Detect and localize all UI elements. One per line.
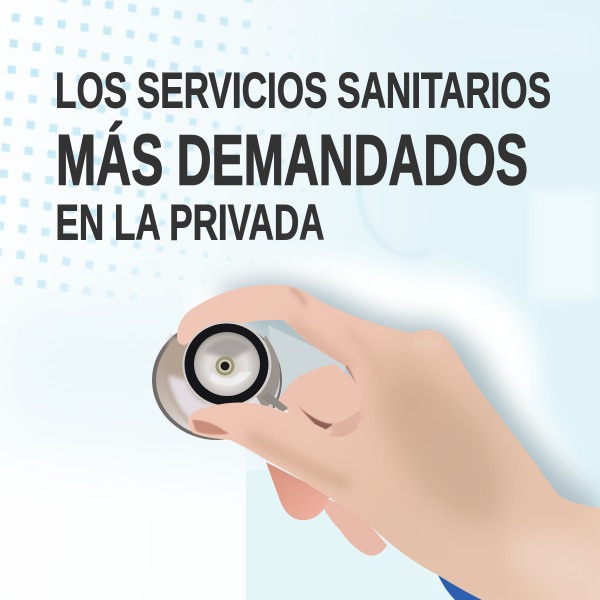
hand shadow and glow	[190, 259, 600, 570]
hand and index finger	[177, 285, 600, 600]
title line 3: EN LA PRIVADA	[56, 194, 324, 250]
title	[55, 62, 551, 250]
halftone dot pattern	[0, 0, 312, 300]
icon: blue sleeve	[438, 575, 482, 600]
curled finger	[278, 364, 372, 440]
stethoscope disc	[152, 320, 282, 440]
stethoscope diaphragm	[182, 322, 272, 408]
middle finger	[266, 462, 330, 520]
thumb	[188, 403, 364, 515]
pinky finger	[318, 495, 387, 556]
stethoscope stem	[261, 392, 288, 412]
hand shading	[288, 286, 580, 582]
lower fingers	[266, 364, 387, 556]
